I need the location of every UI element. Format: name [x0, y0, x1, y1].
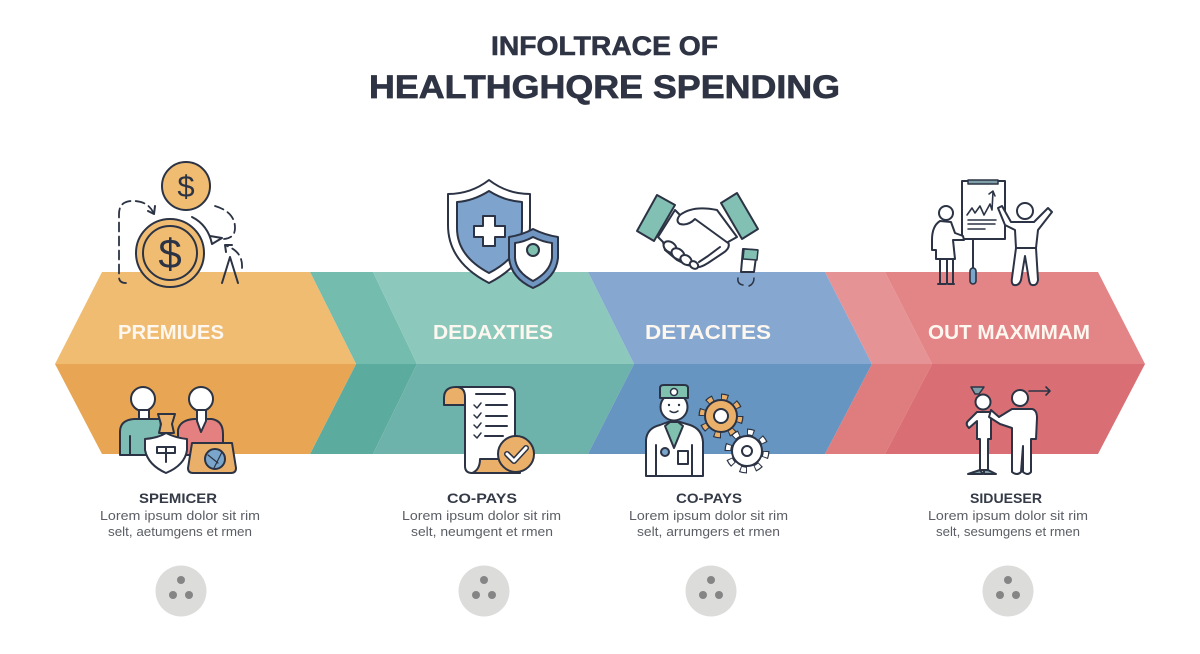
label: dedaxties: DEDAXTIES [433, 322, 553, 344]
description [928, 508, 1088, 539]
segment: teal overlap [310, 272, 417, 454]
title line 2: HEALTHGHQRE SPENDING [369, 69, 840, 105]
dots badge [982, 566, 1034, 616]
icon: presenters with chart [932, 180, 1052, 285]
dots badge [156, 566, 206, 616]
segment: teal [373, 272, 634, 454]
icon: doctor and gears [646, 385, 766, 476]
heading: co-pays: CO-PAYS [676, 490, 742, 506]
description: Lorem ipsum dolor sit rim [629, 508, 788, 523]
description: Lorem ipsum dolor sit rim [100, 508, 260, 523]
description: Lorem ipsum dolor sit rim [928, 508, 1088, 523]
step 1: premiums [100, 162, 260, 616]
description: Lorem ipsum dolor sit rim [402, 508, 561, 523]
heading: sidueser: SIDUESER [970, 490, 1042, 506]
heading: spemicer: SPEMICER [139, 490, 217, 506]
icon: dollar coins: $ [158, 230, 182, 277]
label: premiums: PREMIUES [118, 322, 224, 344]
icon: checklist scroll [444, 387, 534, 473]
icon: shields [448, 180, 558, 288]
segment: red [885, 272, 1145, 454]
title line 1: INFOLTRACE OF [491, 31, 718, 61]
segment: orange [55, 272, 356, 454]
description: selt, aetumgens et rmen [108, 524, 252, 539]
description: selt, neumgent et rmen [411, 524, 553, 539]
icon: handshake [637, 193, 758, 286]
description: selt, sesumgens et rmen [936, 524, 1080, 539]
label: out maxmmam: OUT MAXMMAM [928, 322, 1090, 344]
title [369, 31, 840, 105]
label: detacites: DETACITES [645, 322, 771, 344]
chevron band [55, 272, 1145, 454]
step 2: deductibles [402, 180, 561, 616]
description [629, 508, 788, 539]
dots badge [686, 566, 736, 616]
icon: two people with arrow [967, 387, 1050, 474]
step 3: detacites [629, 193, 788, 616]
description [402, 508, 561, 539]
description: selt, arrumgers et rmen [637, 524, 780, 539]
icon: people with shield and bag [120, 387, 236, 473]
segment: red overlap [825, 272, 932, 454]
dots badge [458, 566, 510, 616]
description [100, 508, 260, 539]
heading: co-pays: CO-PAYS [447, 490, 517, 506]
step 4: out maximum [928, 180, 1090, 616]
icon: dollar coins [119, 162, 242, 287]
segment: blue [588, 272, 872, 454]
icon: dollar coins: $ [177, 169, 195, 204]
